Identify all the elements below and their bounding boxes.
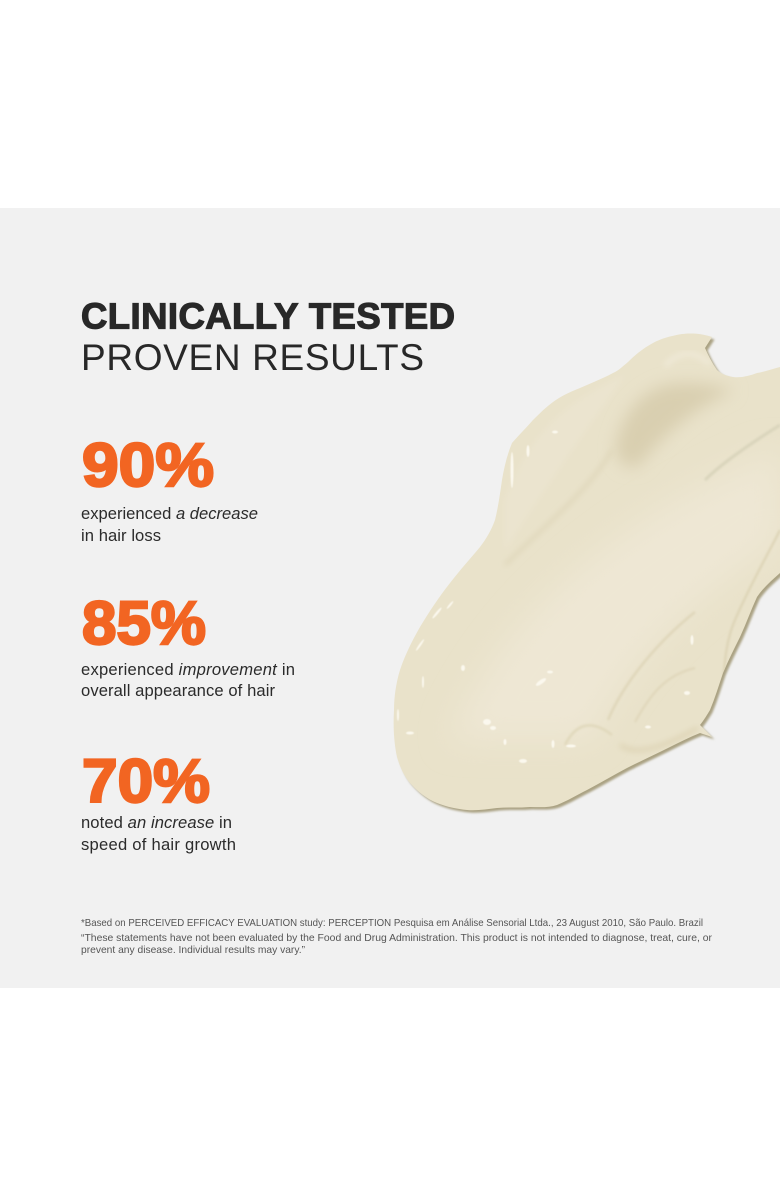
swatch shadow: [396, 336, 780, 813]
stat number: 70%: [82, 747, 210, 815]
fold creases: [543, 462, 604, 529]
heading: [81, 296, 455, 378]
stat number: 85%: [82, 589, 206, 657]
stat description: [81, 813, 236, 854]
gloss highlights: [397, 430, 694, 763]
stat: 90 percent: [81, 431, 258, 545]
footnote line 3: prevent any disease. Individual results may vary.”: [81, 944, 305, 956]
lighter upper lobe: [505, 375, 625, 550]
stat description: in hair loss: [81, 526, 161, 545]
stat description: experienced a decrease: [81, 504, 258, 523]
stat description: experienced improvement in: [81, 660, 295, 679]
footnote line 1: *Based on PERCEIVED EFFICACY EVALUATION study: PERCEPTION Pesquisa em Análise Sensorial Ltda., 23 August 2010, São Paulo. Brazil: [81, 917, 703, 929]
light centre: [480, 478, 767, 726]
stat: 70 percent: [81, 747, 236, 854]
infographic canvas: [0, 208, 780, 988]
swatch body: [385, 325, 780, 820]
footnote disclaimer: [81, 917, 712, 956]
stat description: speed of hair growth: [81, 835, 236, 854]
heading line: proven results: PROVEN RESULTS: [81, 337, 424, 378]
panel: grey background: [0, 208, 780, 988]
stat: 85 percent: [81, 589, 295, 700]
heading line: clinically tested: CLINICALLY TESTED: [81, 296, 455, 336]
footnote line 2: “These statements have not been evaluated by the Food and Drug Administration. This product is not intended to diagnose, treat, cure, or: [81, 932, 712, 944]
stat description: [81, 504, 258, 545]
tan shadow fold: [615, 383, 735, 467]
stat number: 90%: [82, 431, 214, 499]
stat description: [81, 660, 295, 700]
stat description: noted an increase in: [81, 813, 232, 832]
image: cream swatch: [385, 325, 780, 820]
stat description: overall appearance of hair: [81, 681, 275, 700]
